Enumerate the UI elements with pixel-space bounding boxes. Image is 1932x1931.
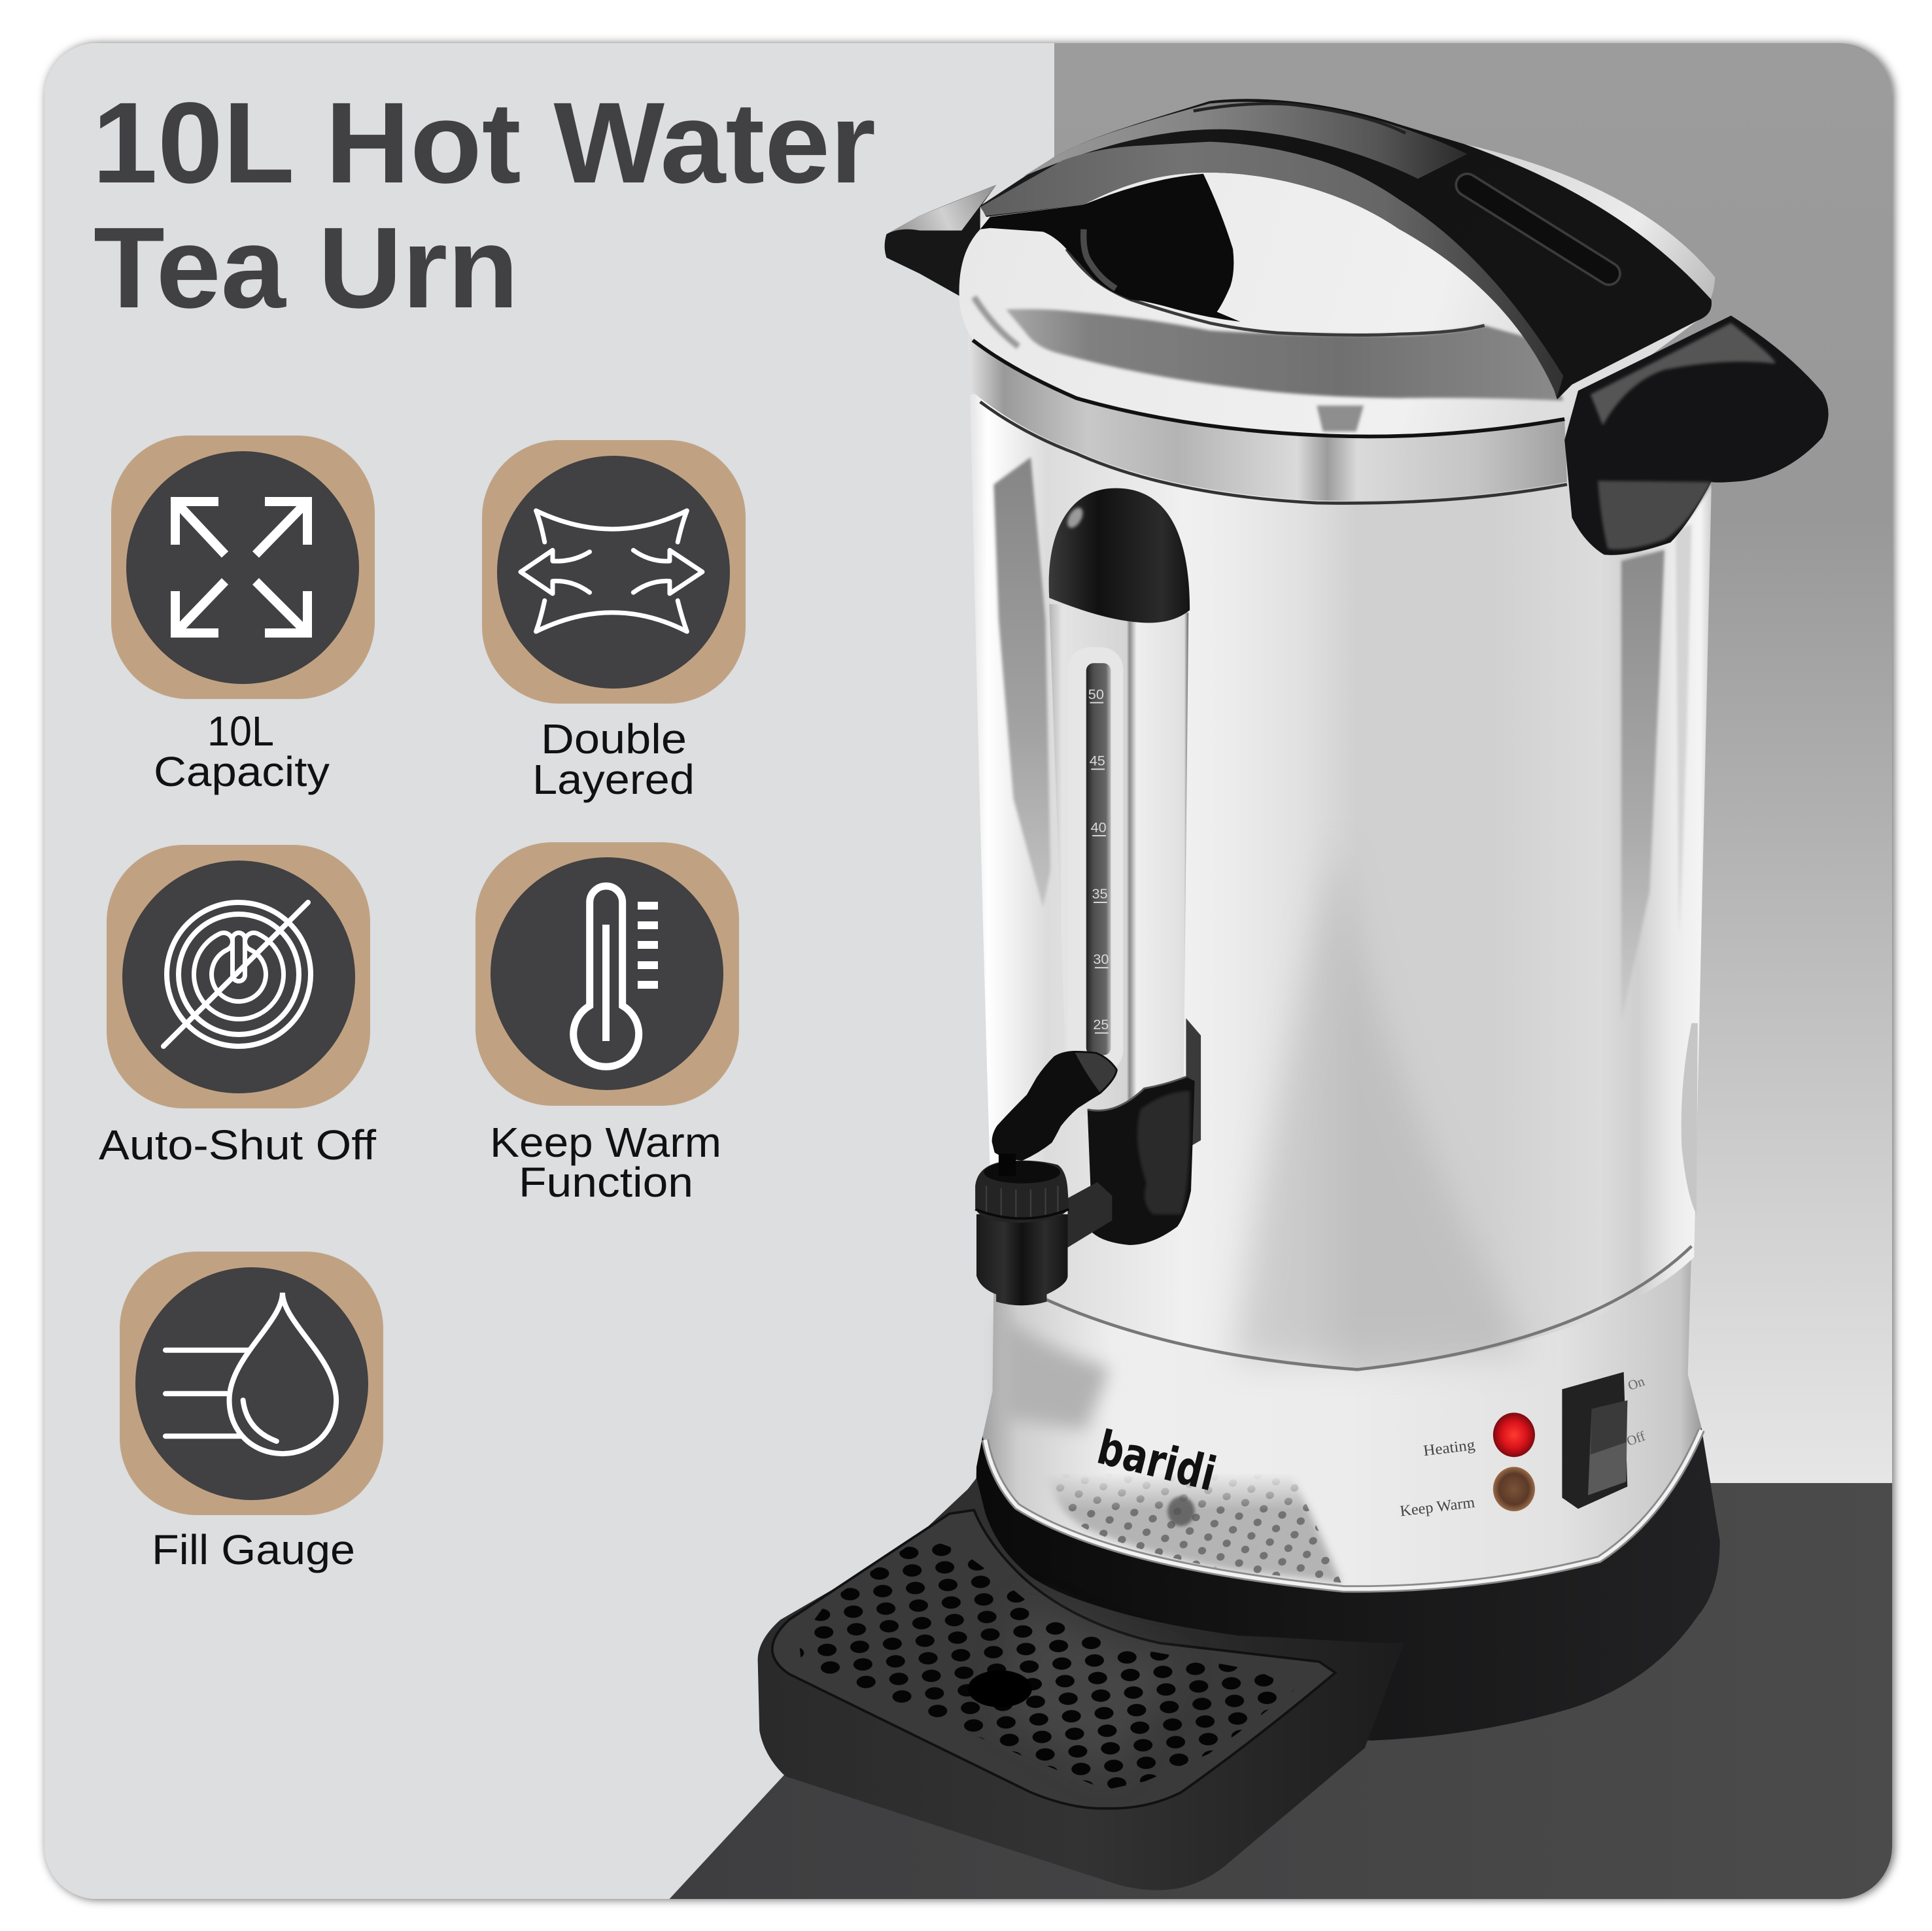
label: Capacity <box>154 748 330 795</box>
tray holes <box>777 1516 1319 1812</box>
handle slot <box>1467 185 1609 273</box>
label: Keep Warm <box>490 1119 721 1166</box>
icon: power with slash <box>164 902 311 1046</box>
label: Fill Gauge <box>152 1526 355 1573</box>
keep warm lamp <box>1493 1467 1535 1511</box>
handle upper highlight <box>1024 102 1467 179</box>
feature: auto shut off <box>99 845 376 1169</box>
level scale: 40 <box>1091 819 1107 835</box>
tray surface <box>772 1510 1336 1809</box>
urn lower band <box>982 1246 1701 1590</box>
level scale <box>1088 686 1109 1033</box>
sight window <box>1049 488 1190 1116</box>
level scale: 25 <box>1093 1016 1109 1033</box>
icon: double layer arrows <box>521 511 702 632</box>
title: 10L Hot Water <box>92 79 876 207</box>
urn lower band: Off <box>1625 1429 1647 1449</box>
label <box>490 1119 721 1206</box>
collar <box>968 335 1567 504</box>
feature: 10L capacity <box>111 436 375 795</box>
level scale: 35 <box>1092 885 1108 902</box>
label: Auto-Shut Off <box>99 1121 376 1169</box>
feature: double layered <box>482 440 746 803</box>
dark floor <box>666 1483 1897 1903</box>
right handle knob <box>1564 316 1829 555</box>
heating lamp <box>1493 1412 1535 1457</box>
lever <box>993 1053 1116 1159</box>
label: Function <box>519 1159 693 1206</box>
tap holder stub <box>1186 1018 1201 1149</box>
level scale: 50 <box>1088 686 1104 702</box>
urn base <box>974 1427 1720 1741</box>
icon: water drop <box>165 1293 336 1454</box>
tap <box>975 1053 1195 1305</box>
logo: baridi <box>1092 1420 1221 1501</box>
lid <box>959 111 1715 436</box>
rocker switch <box>1562 1372 1627 1509</box>
product: tea urn <box>758 99 1829 1890</box>
label <box>154 708 330 795</box>
left handle knob <box>885 185 996 296</box>
level scale: 30 <box>1093 951 1109 967</box>
drain hole <box>968 1670 1032 1707</box>
spout holder <box>1088 1077 1195 1245</box>
label: Double <box>541 715 687 762</box>
tap body <box>976 1214 1067 1305</box>
level scale: 45 <box>1090 753 1105 769</box>
title: Tea Urn <box>94 204 519 332</box>
lid black reflection <box>980 174 1240 322</box>
window cap <box>1049 488 1190 623</box>
icon: thermometer <box>574 886 658 1067</box>
lid reflection band <box>1006 309 1563 401</box>
connector <box>1067 1182 1112 1248</box>
urn lower band: On <box>1626 1375 1647 1393</box>
label: Layered <box>532 756 695 803</box>
urn lower band: Keep Warm <box>1399 1494 1475 1520</box>
drip tray <box>758 1478 1404 1890</box>
feature: fill gauge <box>120 1252 383 1573</box>
indicator labels: Heating <box>1423 1437 1476 1460</box>
handle lower band <box>980 142 1563 397</box>
lid handle <box>980 99 1712 400</box>
label <box>532 715 695 803</box>
feature: keep warm function <box>475 842 739 1206</box>
urn main body <box>971 394 1712 1371</box>
right gradient panel <box>1054 39 1898 1484</box>
window frame <box>1067 647 1123 1072</box>
title <box>92 79 876 332</box>
level tube <box>1086 663 1111 1055</box>
label: 10L <box>207 708 274 755</box>
tap collar <box>975 1161 1069 1223</box>
icon: expand arrows <box>175 502 307 633</box>
